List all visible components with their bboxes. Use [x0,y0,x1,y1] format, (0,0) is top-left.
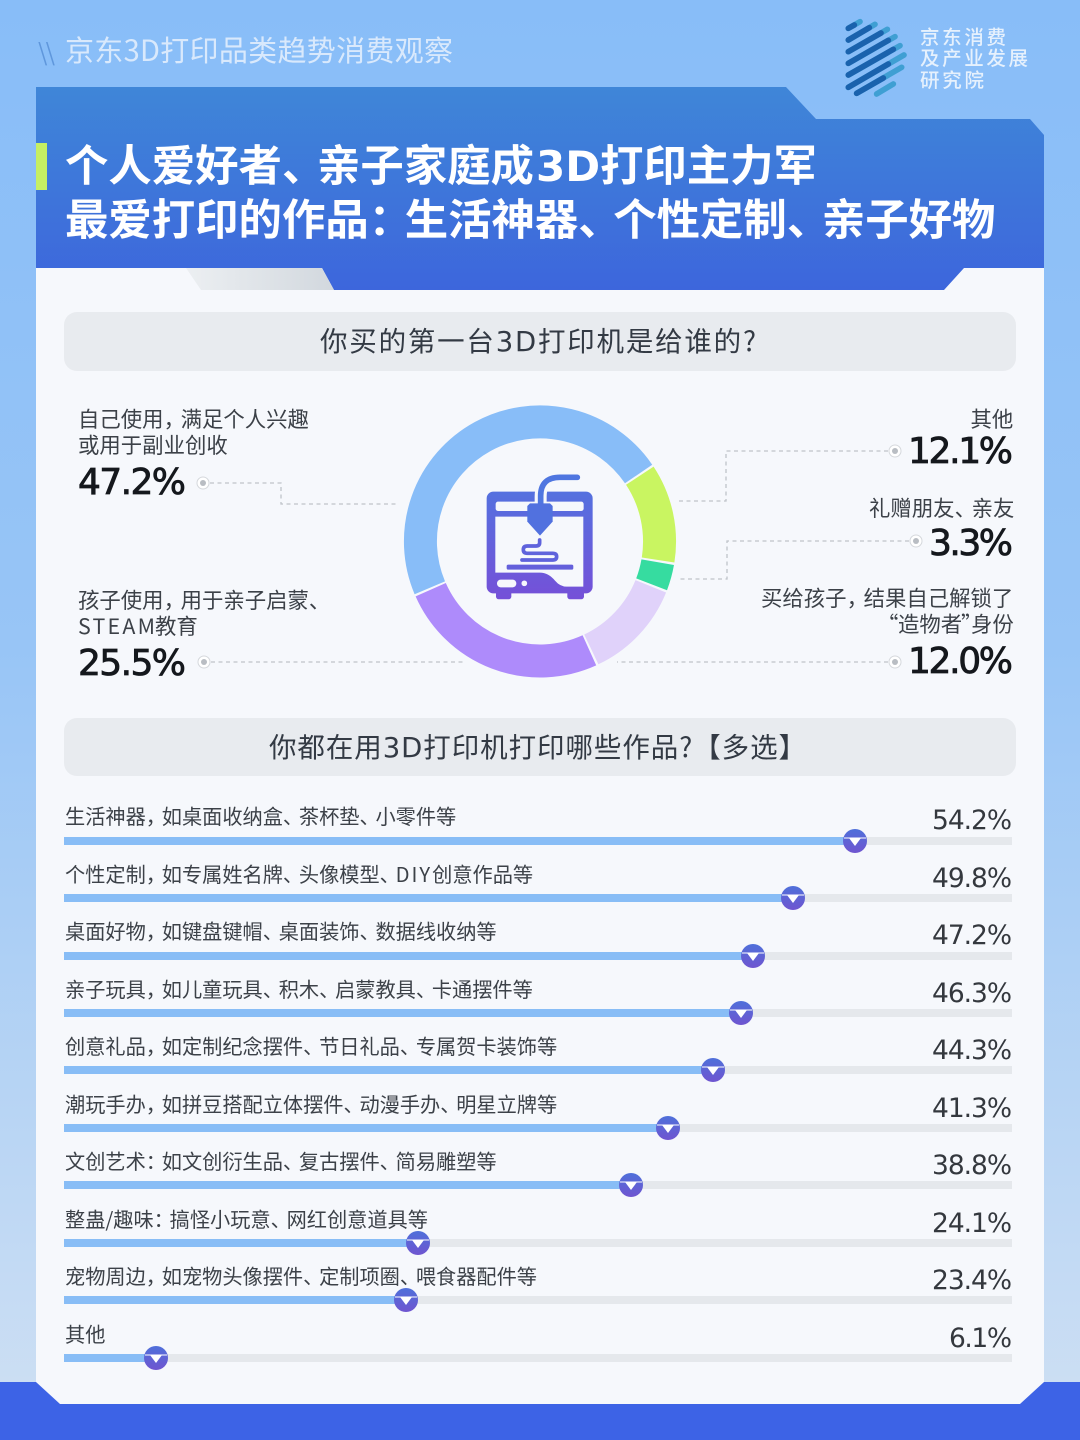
row 1: 生活神器，如桌面收纳盒、茶杯垫、小零件等 [65,801,456,830]
callout: unlocked maker [761,582,1014,682]
leader lines [210,451,909,662]
segment: self use 47.2% [420,422,639,588]
title: 亲子家庭成 [317,132,534,194]
print head [527,503,553,536]
control buttons [497,580,516,587]
row 10 [64,1319,1012,1370]
row 5 [64,1031,1012,1082]
banner shadow tab [186,268,334,290]
row 8 [64,1204,1012,1255]
title [65,132,995,248]
callout: unlocked maker: 买给孩子，结果自己解锁了 [761,582,1013,613]
row 9: 宠物周边，如宠物头像摆件、定制项圈、喂食器配件等 [65,1261,537,1290]
row 9 [64,1261,1012,1312]
title banner [36,87,1044,290]
callout: self use: 自己使用，满足个人兴趣 [78,403,309,434]
row 4: 46.3% [932,978,1012,1009]
callout: kids use: 孩子使用，用于亲子启蒙、 [78,584,330,615]
callout: kids use: STEAM [78,610,155,641]
row 1 [64,801,1012,853]
bottom band [0,1382,1080,1440]
callout: other [889,403,1013,472]
printer feet [496,590,511,599]
row 2 [64,859,1012,910]
content panel [36,262,1044,1404]
row 8: 整蛊/趣味：搞怪小玩意、网红创意道具等 [65,1204,428,1233]
row 7 [64,1146,1012,1197]
row 4: 亲子玩具，如儿童玩具、积木、启蒙教具、卡通摆件等 [65,974,533,1003]
segment: gifts 3.3% [652,562,658,584]
callout: gifts: 3.3% [929,523,1013,564]
row 4 [64,974,1012,1025]
row 3 [64,916,1012,968]
row 5: 44.3% [932,1035,1012,1066]
logo text: 京东消费 [920,21,1006,50]
printer frame [487,492,593,593]
row 5: 创意礼品，如定制纪念摆件、节日礼品、专属贺卡装饰等 [65,1031,557,1060]
section heading: first printer: 你买的第一台3D打印机是给谁的? [320,319,756,359]
callout: kids use: 教育 [155,610,198,641]
title: 打印主力军 [600,132,817,194]
icon: 3D printer [487,477,593,599]
segment: unlocked 12.0% [591,586,651,649]
row 8: 24.1% [932,1208,1012,1239]
title: 最爱打印的作品：生活神器、个性定制、亲子好物 [65,186,995,248]
callout: kids use [78,584,330,684]
callout: unlocked maker: “ [877,608,898,639]
segment: kids 25.5% [431,590,589,661]
callout: other: 12.1% [908,431,1013,472]
logo text: 及产业发展 [920,42,1028,71]
logo text: 研究院 [920,64,984,93]
row 9: 23.4% [932,1265,1012,1296]
callout: unlocked maker: ” [961,608,982,639]
callout: other: 其他 [970,403,1013,434]
logo mark [848,22,904,94]
row 6: 41.3% [932,1093,1012,1124]
row 2: 49.8% [932,863,1012,894]
callout: gifts [869,492,1014,564]
donut chart [420,422,660,661]
section heading: printed works [64,718,1016,776]
row 7: 38.8% [932,1150,1012,1181]
callout: unlocked maker: 12.0% [908,641,1013,682]
title: 3D [536,142,600,191]
section heading: printed works: 你都在用3D打印机打印哪些作品?【多选】 [269,725,806,765]
logo text [920,21,1028,93]
callout: gifts: 礼赠朋友、亲友 [869,492,1014,523]
row 6: 潮玩手办，如拼豆搭配立体摆件、动漫手办、明星立牌等 [65,1089,557,1118]
segment: other 12.1% [640,476,660,560]
title: 个人爱好者、 [65,132,325,194]
filament [541,477,577,505]
printed object [522,540,557,560]
row 1: 54.2% [932,805,1012,836]
build plate [507,565,573,570]
callout: self use: 47.2% [78,462,186,503]
printer openings [496,502,584,511]
row 10: 其他 [65,1319,105,1348]
row 6 [64,1089,1012,1140]
top label: \\ [38,33,56,68]
logo [848,21,1028,94]
row 7: 文创艺术：如文创衍生品、复古摆件、简易雕塑等 [65,1146,497,1175]
accent bar [36,143,47,190]
row 2: 个性定制，如专属姓名牌、头像模型、DIY创意作品等 [65,859,533,888]
bar chart: printed works [64,801,1012,1370]
top label: 京东3D打印品类趋势消费观察 [65,28,453,70]
row 3: 47.2% [932,920,1012,951]
callout: unlocked maker: 身份 [971,608,1014,639]
callout: unlocked maker: 造物者 [898,608,962,639]
callout: self use: 或用于副业创收 [78,429,228,460]
section heading: first printer [64,312,1016,371]
row 10: 6.1% [949,1323,1012,1354]
callout: kids use: 25.5% [78,643,186,684]
callout: self use [78,403,309,503]
row 3: 桌面好物，如键盘键帽、桌面装饰、数据线收纳等 [65,916,497,945]
